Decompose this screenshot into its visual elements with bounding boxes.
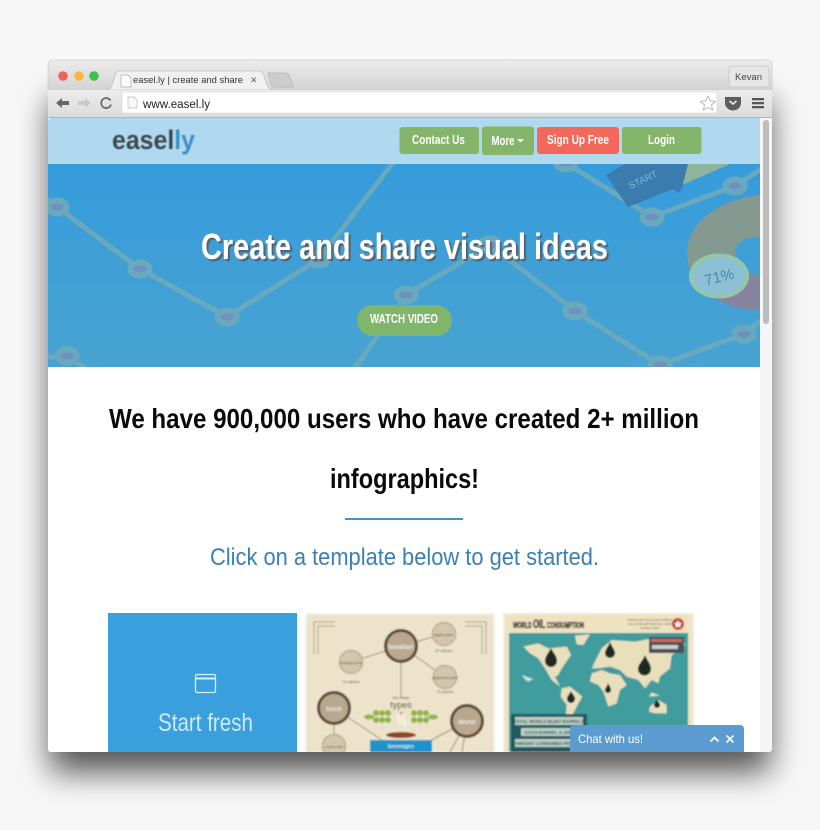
hero title: Create and share visual ideas [201, 226, 608, 267]
subheading: Click on a template below to get started. [210, 544, 599, 571]
hero title [202, 232, 610, 262]
address bar: www.easel.ly [142, 99, 210, 111]
lunch node [318, 692, 350, 724]
watch video button [357, 305, 452, 336]
icon: forward arrow [78, 98, 91, 108]
icon: menu [752, 98, 764, 108]
beverages banner: beverages [388, 744, 414, 750]
window shadow [50, 100, 770, 772]
button: login: Login [648, 132, 675, 147]
apple juice node [432, 622, 456, 653]
template card: world oil consumption [503, 613, 694, 752]
button: sign up free [537, 127, 619, 154]
button: more: More [492, 133, 514, 148]
apple juice node: apple juice [434, 632, 454, 637]
steaming cup [386, 714, 416, 738]
connector lines [334, 634, 467, 752]
button: login [622, 127, 702, 154]
tab close icon: × [250, 74, 257, 86]
logo: easelly [112, 125, 195, 155]
icon: pocket [725, 97, 741, 110]
lunch node: lunch [326, 706, 342, 713]
main heading: We have 900,000 users who have created 2+ million [109, 403, 699, 434]
orange juice node [340, 650, 363, 684]
legend box [649, 637, 684, 653]
map note: OIL CONSUMPTION WILL KEEP [628, 622, 672, 626]
browser tab bar [48, 60, 772, 90]
donut chart decoration [687, 195, 760, 310]
icon: page favicon [121, 75, 131, 87]
center title: of [399, 710, 404, 715]
profile button [729, 66, 769, 87]
icon: back arrow [56, 98, 69, 108]
center title: the many [393, 695, 409, 700]
icon: star badge [672, 618, 684, 630]
stat labels [511, 714, 587, 752]
map note: RISING 100% [641, 626, 660, 630]
cola node [322, 734, 346, 758]
orange juice node: 79 calories [343, 680, 360, 684]
orange juice node: orange juice [340, 660, 363, 665]
stat labels: EACH BARREL X 1000 [525, 730, 574, 735]
button: contact us: Contact Us [412, 132, 465, 147]
icon: reload [101, 98, 111, 108]
button: more [482, 126, 534, 155]
world map [509, 633, 688, 752]
browser toolbar [48, 90, 772, 118]
icon: close [726, 736, 734, 742]
browser window [40, 60, 775, 758]
web page [40, 118, 775, 758]
main heading: infographics! [330, 463, 479, 494]
dinner node [452, 706, 482, 736]
dinner node: dinner [458, 719, 477, 726]
leaf decorations [364, 710, 438, 723]
active tab [107, 71, 273, 90]
icon: bookmark star [701, 96, 715, 110]
stat labels: TOTAL WORLD 84,007 BARRELS [514, 719, 584, 724]
address bar [122, 92, 717, 113]
watch video button: WATCH VIDEO [370, 311, 438, 326]
cola node: coca cola [326, 744, 343, 749]
start arrow decoration [606, 164, 730, 207]
map note [627, 618, 673, 630]
template card: types of beverages [305, 613, 495, 758]
oil drops [545, 642, 660, 708]
button: contact us [400, 127, 479, 154]
site navigation bar [48, 118, 760, 164]
grapefruit juice node: 75 calories [437, 690, 454, 694]
stat labels: AMOUNT CONSUMED PER DAY [515, 741, 583, 746]
apple juice node: 87 calories [436, 649, 453, 653]
hero banner [48, 164, 760, 367]
scrollbar [760, 118, 772, 752]
chat widget [570, 725, 744, 752]
breakfast node [386, 630, 416, 662]
main heading [109, 403, 699, 494]
start fresh label: Start fresh [158, 709, 253, 737]
hero background line chart [48, 164, 760, 367]
new tab button [268, 73, 293, 87]
breakfast node: breakfast [389, 645, 414, 651]
grapefruit juice node [432, 666, 459, 694]
tab title: easel.ly | create and share [133, 75, 243, 86]
map title: WORLD OIL CONSUMPTION [513, 617, 584, 631]
map note: FROM 2009 UNTIL 2012 WORLD [627, 618, 673, 622]
window control buttons [58, 71, 99, 81]
percent badge: 71% [703, 266, 736, 289]
profile button: Kevan [735, 72, 762, 83]
icon: blank window [196, 674, 216, 692]
hero title: Create and share visual ideas [203, 228, 610, 269]
corner ornaments [314, 622, 486, 654]
start arrow decoration: START [627, 169, 659, 192]
center title: types [390, 700, 412, 710]
grapefruit juice node: grapefruit juice [432, 675, 459, 680]
button: sign up free: Sign Up Free [547, 132, 609, 147]
chat widget: Chat with us! [578, 732, 643, 746]
beverages banner [370, 740, 432, 752]
center title [390, 695, 412, 715]
card: start fresh [108, 613, 297, 752]
icon: chevron up [710, 738, 718, 742]
